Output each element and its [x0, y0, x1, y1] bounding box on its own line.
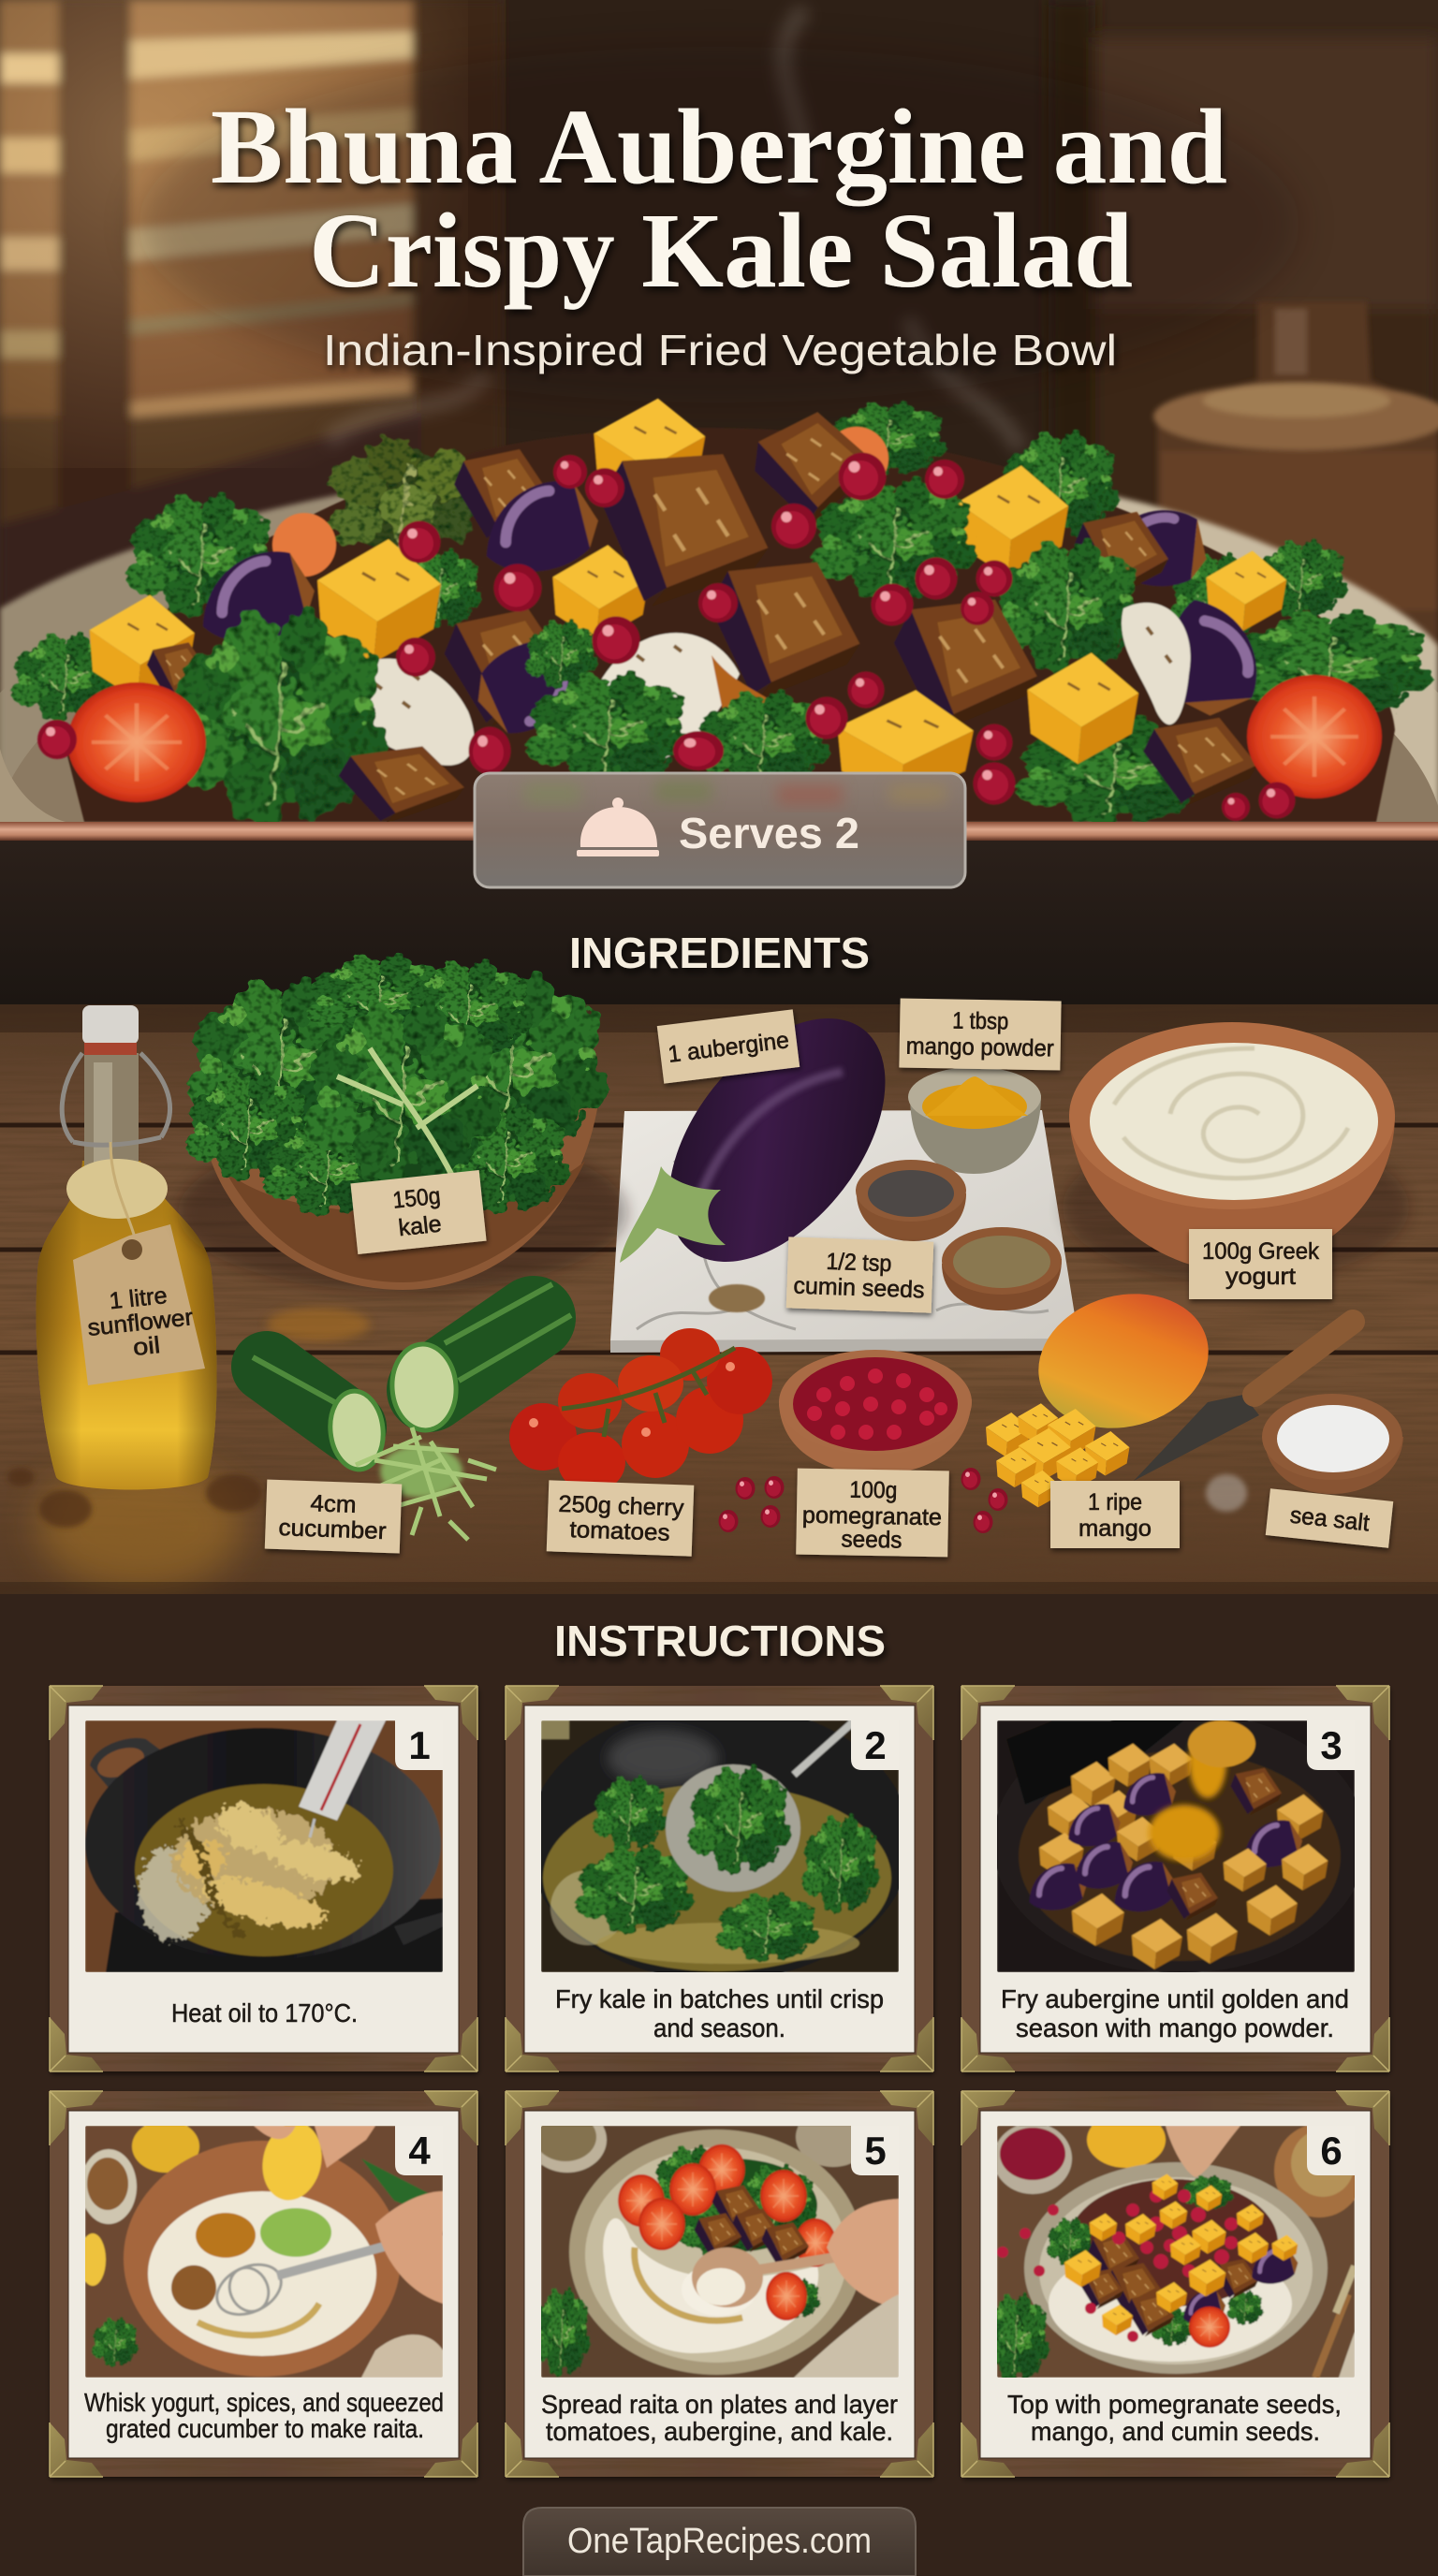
label: sea salt: [1266, 1488, 1393, 1548]
label: cumin seeds: [786, 1237, 933, 1313]
label: cucumber: [265, 1480, 402, 1554]
steam: [328, 9, 1020, 449]
cherry tomatoes: [509, 1328, 772, 1492]
icon: cloche: [577, 798, 659, 856]
marble board: [610, 1110, 1078, 1353]
label: cumin seeds: 1/2 tsp: [826, 1249, 892, 1277]
servings text: Serves 2: [679, 809, 859, 857]
back layer: cubes: [90, 399, 1286, 701]
middle layer: [445, 438, 1432, 739]
label: kale: 150g: [391, 1183, 442, 1214]
photo: spreading raita: [541, 2126, 899, 2378]
title: Bhuna Aubergine and: [211, 87, 1227, 206]
caption 2: and season.: [653, 2013, 785, 2042]
label: mango powder: [899, 999, 1062, 1070]
label: sunflower oil: sunflower: [86, 1304, 195, 1341]
panel: step 6: [961, 2091, 1389, 2477]
footer badge: [523, 2508, 916, 2576]
panel: hero photo: [0, 0, 1438, 822]
caption 4: grated cucumber to make raita.: [106, 2414, 424, 2443]
plate: [0, 492, 1438, 822]
mango: [1023, 1276, 1224, 1446]
panel: ingredients table: [0, 956, 1438, 1595]
cucumbers: [253, 1284, 571, 1540]
kale leaves: [186, 956, 609, 1215]
label: tomatoes: tomatoes: [569, 1516, 670, 1546]
spice bowls: [709, 1067, 1062, 1312]
back layer: kale: [11, 403, 1348, 721]
label: sunflower oil: [83, 1280, 197, 1366]
mango cubes: [986, 1403, 1129, 1507]
label: yogurt: 100g Greek: [1202, 1238, 1319, 1265]
label: cucumber: cucumber: [278, 1515, 387, 1544]
caption 5: [541, 2390, 898, 2446]
yogurt bowl: [1063, 1022, 1409, 1282]
knife: [1134, 1322, 1353, 1481]
aubergine: [620, 979, 929, 1301]
number tab 6: 6: [1320, 2129, 1343, 2173]
section backdrop: ingredients header: [0, 841, 1438, 1005]
label: sea salt: sea salt: [1289, 1502, 1371, 1536]
caption 3: season with mango powder.: [1016, 2013, 1334, 2042]
cumin pile: [709, 1284, 765, 1312]
label: pomegranate: pomegranate: [802, 1502, 942, 1530]
panel: step 3: [961, 1686, 1389, 2071]
number tab 4: [395, 2126, 443, 2175]
hero kitchen backdrop: [0, 0, 1438, 650]
label: aubergine: 1 aubergine: [667, 1027, 790, 1068]
caption 2: Fry kale in batches until crisp: [555, 1984, 884, 2013]
caption 4: Whisk yogurt, spices, and squeezed: [84, 2388, 444, 2417]
label: sunflower oil: oil: [132, 1332, 161, 1361]
pomegranate seeds: [37, 453, 1296, 821]
website text: OneTapRecipes.com: [567, 2522, 872, 2561]
serves badge: [475, 773, 965, 887]
salt bowl: [1206, 1394, 1403, 1512]
number tab 2: 2: [864, 1723, 887, 1767]
bowl: mango powder: [908, 1067, 1041, 1174]
label: tomatoes: 250g cherry: [558, 1491, 684, 1521]
panel: step 5: [506, 2091, 933, 2477]
cucumber large: [389, 1284, 571, 1432]
grated cucumber: [356, 1427, 496, 1540]
panel: step 2: [506, 1686, 933, 2071]
label: kale: kale: [397, 1211, 443, 1241]
front layer: kale, cubes, tomatoes: [67, 614, 1382, 824]
label: aubergine: [657, 1009, 800, 1084]
wooden table: [0, 1004, 1438, 1595]
caption 4: [84, 2388, 444, 2443]
salad on plate: [11, 399, 1432, 824]
title: [211, 87, 1227, 310]
photo: aubergine in wok: [997, 1720, 1355, 1972]
label: pomegranate: seeds: [841, 1526, 902, 1554]
photo: frying kale: [541, 1720, 899, 1972]
caption 6: Top with pomegranate seeds,: [1007, 2390, 1342, 2419]
photo: whisking raita: [85, 2126, 443, 2378]
title dark wash: [139, 47, 1299, 402]
number tab 5: 5: [864, 2129, 887, 2173]
caption 1: Heat oil to 170°C.: [171, 1998, 358, 2027]
raita drizzle: [346, 603, 1191, 766]
label: mango: [1050, 1481, 1180, 1548]
number tab 4: 4: [408, 2129, 431, 2173]
label: pomegranate: [796, 1469, 949, 1557]
number tab 1: 1: [408, 1723, 431, 1767]
caption 5: Spread raita on plates and layer: [541, 2390, 898, 2419]
photo: oil in wok: [85, 1720, 443, 1972]
caption 3: [1001, 1984, 1349, 2042]
caption 2: [555, 1984, 884, 2042]
number tab 3: [1307, 1720, 1355, 1770]
number tab 5: [851, 2126, 899, 2175]
heading: ingredients: INGREDIENTS: [569, 929, 870, 977]
label: mango powder: 1 tbsp: [952, 1007, 1008, 1035]
kale bowl: [178, 956, 627, 1292]
cucumber small: [253, 1357, 387, 1472]
subtitle: Indian-Inspired Fried Vegetable Bowl: [323, 326, 1117, 374]
copper divider band: [0, 822, 1438, 841]
label: sunflower oil: 1 litre: [108, 1282, 169, 1314]
bowl: black spice: [856, 1160, 966, 1241]
number tab 6: [1307, 2126, 1355, 2175]
caption 6: mango, and cumin seeds.: [1031, 2417, 1320, 2446]
section backdrop: instructions: [0, 1594, 1438, 2576]
orange tomatoes back: [839, 425, 889, 472]
caption 3: Fry aubergine until golden and: [1001, 1984, 1349, 2013]
pomegranate bowl: [779, 1350, 972, 1474]
copper pot: [1153, 301, 1438, 651]
label: mango powder: mango powder: [906, 1033, 1054, 1061]
caption 5: tomatoes, aubergine, and kale.: [546, 2417, 893, 2446]
number tab 3: 3: [1320, 1723, 1343, 1767]
bowl: cumin seeds: [942, 1227, 1062, 1310]
label: tomatoes: [547, 1480, 694, 1557]
label: yogurt: yogurt: [1225, 1264, 1296, 1290]
number tab 1: [395, 1720, 443, 1770]
label: kale: [350, 1170, 487, 1254]
number tab 2: [851, 1720, 899, 1770]
title: Crispy Kale Salad: [309, 191, 1133, 310]
seed scatter: [7, 1468, 262, 1528]
photo: topping the plate: [997, 2126, 1355, 2378]
heading: instructions: INSTRUCTIONS: [554, 1617, 886, 1665]
panel: step 1: [50, 1686, 477, 2071]
label: mango: 1 ripe: [1088, 1489, 1142, 1515]
label: mango: mango: [1078, 1515, 1152, 1542]
label: cucumber: 4cm: [310, 1490, 357, 1518]
caption 6: [1007, 2390, 1342, 2446]
label: cumin seeds: cumin seeds: [793, 1273, 925, 1303]
label: pomegranate: 100g: [849, 1477, 898, 1503]
panel: step 4: [50, 2091, 477, 2477]
label: yogurt: [1189, 1229, 1332, 1299]
loose pomegranate seeds: [719, 1468, 1007, 1533]
oil bottle with tag: [37, 1005, 217, 1490]
